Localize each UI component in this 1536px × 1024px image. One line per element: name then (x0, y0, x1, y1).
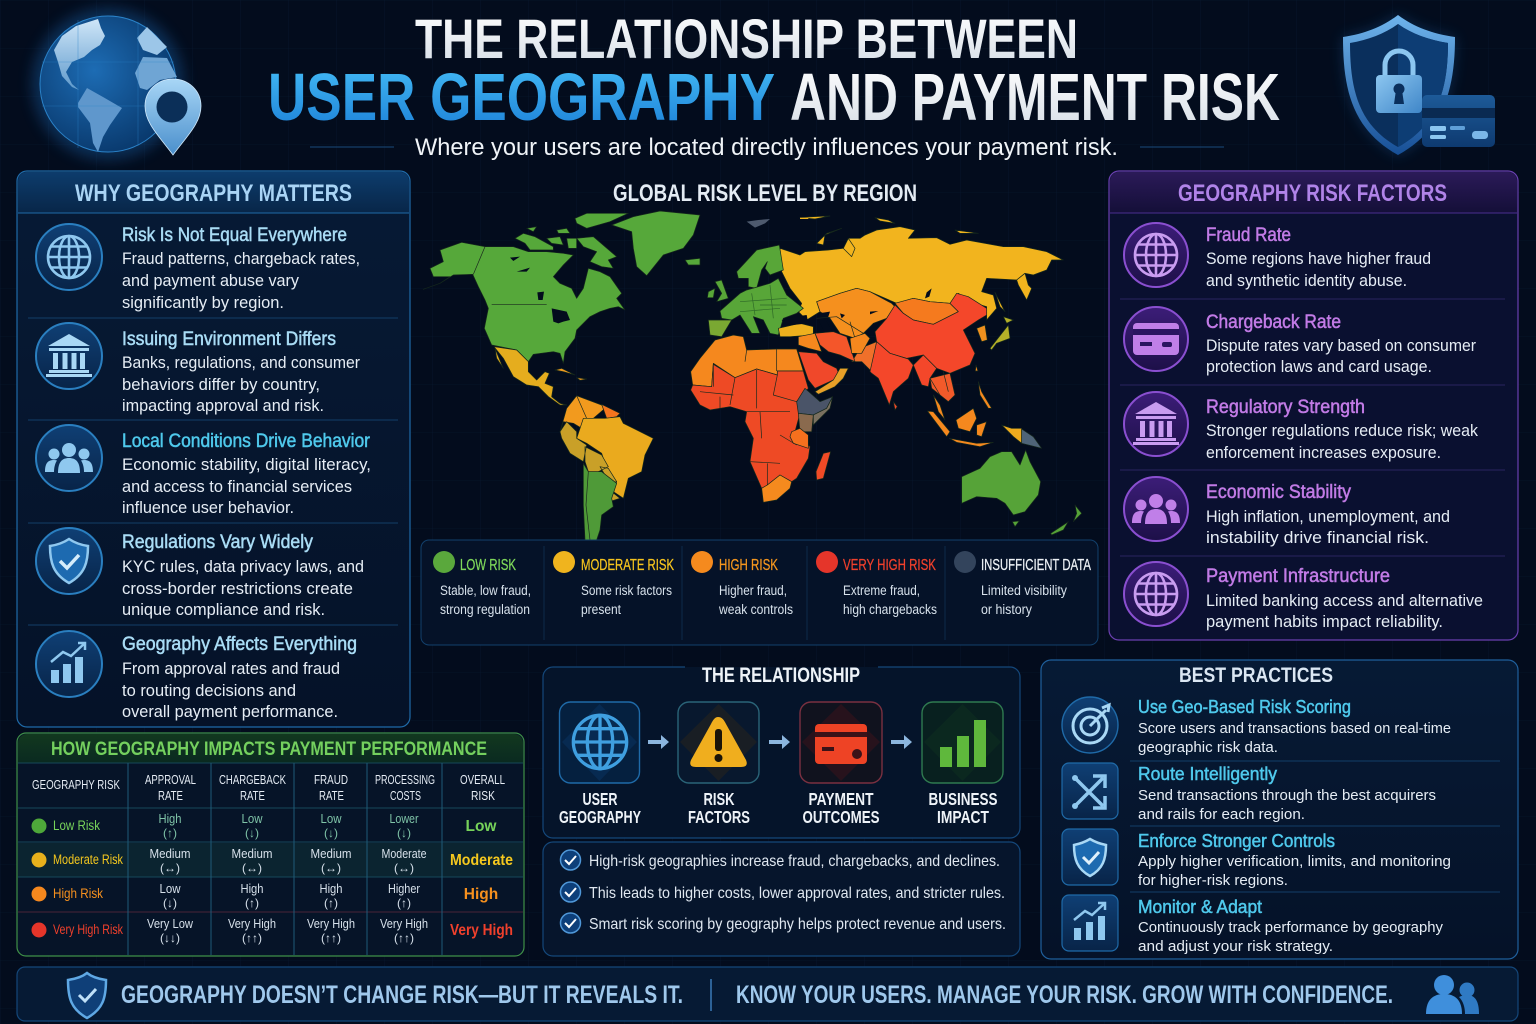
item: risk is not equal everywhere (36, 224, 360, 312)
row: high risk: High (240, 881, 264, 896)
legend: moderate risk (553, 551, 674, 617)
item: payment infrastructure (1124, 562, 1483, 631)
takeaway 2: This leads to higher costs, lower approval rates, and stricter rules. (589, 885, 1005, 902)
practice: route intelligently (1062, 763, 1436, 823)
item: geography affects everything: Geography Affects Everything (122, 634, 357, 655)
practice: enforce stronger controls: Enforce Stronger Controls (1138, 831, 1335, 851)
legend: high risk: Higher fraud, (719, 583, 787, 598)
row: very high risk: (↑↑) (394, 931, 414, 945)
item: fraud rate (1124, 223, 1431, 290)
row: moderate risk: (↔) (394, 861, 414, 875)
row: very high risk: Very High (228, 916, 276, 931)
row: very high risk (32, 916, 513, 945)
table header row: APPROVAL (145, 772, 196, 787)
table header row: RATE (319, 788, 344, 803)
legend: insufficient data (954, 551, 1091, 617)
table header row: RATE (240, 788, 265, 803)
row: moderate risk: Moderate Risk (53, 852, 123, 867)
item: local conditions drive behavior (36, 425, 371, 517)
row: moderate risk: (↔) (321, 861, 341, 875)
item: risk is not equal everywhere: significantly by region. (122, 293, 284, 312)
row: moderate risk: (↔) (242, 861, 262, 875)
map: asia and oceania (780, 216, 1082, 535)
item: issuing environment differs: behaviors differ by country, (122, 375, 320, 394)
arrow (769, 735, 790, 749)
takeaway 3: Smart risk scoring by geography helps protect revenue and users. (589, 916, 1006, 933)
takeaway 1: High-risk geographies increase fraud, chargebacks, and declines. (589, 853, 1000, 870)
item: economic stability (1124, 477, 1450, 547)
step: business impact (922, 702, 1003, 827)
legend: moderate risk: Some risk factors (581, 583, 672, 598)
table header row: RATE (158, 788, 183, 803)
legend: very high risk: high chargebacks (843, 602, 937, 617)
item: regulations vary widely (36, 528, 364, 619)
row: high risk: (↑) (245, 896, 259, 910)
panel: how geography impacts payment performance (17, 733, 524, 956)
row: high risk: Low (160, 881, 181, 896)
heading: WHY GEOGRAPHY MATTERS (75, 180, 352, 207)
item: issuing environment differs (36, 323, 360, 415)
legend: low risk (433, 551, 531, 617)
heading: GEOGRAPHY RISK FACTORS (1178, 180, 1447, 207)
row: very high risk: Very High (450, 922, 513, 939)
step: business impact: IMPACT (937, 807, 989, 827)
item: local conditions drive behavior: Economic stability, digital literacy, (122, 455, 371, 474)
table header row: COSTS (390, 788, 421, 803)
item: issuing environment differs: Issuing Environment Differs (122, 329, 336, 350)
practice: enforce stronger controls (1062, 829, 1451, 889)
row: high risk: High (320, 881, 342, 896)
row: low risk: Lower (390, 811, 419, 826)
row: low risk: Low (242, 811, 263, 826)
practice: monitor and adapt: Continuously track performance by geography (1138, 919, 1443, 936)
item: risk is not equal everywhere: Risk Is Not Equal Everywhere (122, 225, 347, 246)
item: regulations vary widely: Regulations Vary Widely (122, 532, 313, 553)
step: risk factors: RISK (704, 789, 735, 809)
title: USER GEOGRAPHY (268, 60, 775, 135)
practice: route intelligently: Route Intelligently (1138, 764, 1277, 784)
legend: very high risk: VERY HIGH RISK (843, 557, 936, 574)
row: very high risk: Very High (380, 916, 428, 931)
world risk map (423, 211, 1082, 540)
step: risk factors: FACTORS (688, 807, 750, 827)
item: risk is not equal everywhere: Fraud patterns, chargeback rates, (122, 249, 360, 268)
table header row (32, 772, 505, 803)
item: issuing environment differs: impacting approval and risk. (122, 396, 324, 415)
step: risk factors (678, 702, 759, 827)
table header row: GEOGRAPHY RISK (32, 777, 120, 792)
row: very high risk: Very High (307, 916, 355, 931)
item: geography affects everything: overall payment performance. (122, 702, 338, 721)
row: moderate risk: Medium (310, 846, 352, 861)
row: moderate risk: (↔) (160, 861, 180, 875)
title (268, 7, 1280, 135)
item: regulations vary widely: KYC rules, data privacy laws, and (122, 557, 364, 576)
practice: geo-based risk scoring: Score users and transactions based on real-time (1138, 720, 1451, 737)
legend: low risk: LOW RISK (460, 557, 516, 574)
row: moderate risk: Medium (232, 846, 272, 861)
row: moderate risk: Moderate (382, 846, 426, 861)
item: chargeback rate: protection laws and card usage. (1206, 357, 1432, 376)
legend: very high risk: Extreme fraud, (843, 583, 920, 598)
step: user geography (559, 702, 641, 827)
practice: enforce stronger controls: for higher-risk regions. (1138, 872, 1288, 889)
panel: best practices (1041, 660, 1518, 959)
row: low risk: (↑) (163, 826, 177, 840)
item: local conditions drive behavior: Local Conditions Drive Behavior (122, 431, 371, 452)
item: regulations vary widely: unique compliance and risk. (122, 600, 325, 619)
item: regulatory strength: enforcement increases exposure. (1206, 443, 1441, 462)
subtitle: Where your users are located directly influences your payment risk. (415, 134, 1118, 161)
practice: monitor and adapt: Monitor & Adapt (1138, 897, 1262, 917)
legend: low risk: strong regulation (440, 602, 530, 617)
legend: high risk: HIGH RISK (719, 557, 778, 574)
title: THE RELATIONSHIP BETWEEN (415, 7, 1078, 70)
row: low risk: Low (320, 811, 342, 826)
legend: very high risk (816, 551, 937, 617)
item: payment infrastructure: Limited banking access and alternative (1206, 591, 1483, 610)
item: regulatory strength: Stronger regulations reduce risk; weak (1206, 421, 1478, 440)
item: geography affects everything (36, 631, 357, 721)
heading: BEST PRACTICES (1179, 664, 1333, 687)
practice: monitor and adapt (1062, 895, 1443, 955)
row: high risk: (↓) (163, 896, 177, 910)
step: payment outcomes (800, 702, 882, 827)
legend: moderate risk: MODERATE RISK (581, 557, 674, 574)
row: high risk: Higher (388, 881, 421, 896)
item: payment infrastructure: Payment Infrastructure (1206, 566, 1390, 587)
practice: geo-based risk scoring: Use Geo-Based Risk Scoring (1138, 697, 1351, 717)
legend: high risk: weak controls (718, 602, 793, 617)
panel: relationship takeaways (543, 842, 1020, 956)
row: very high risk: (↑↑) (242, 931, 262, 945)
table header row: CHARGEBACK (219, 772, 286, 787)
icon: footer shield (68, 973, 106, 1018)
row: low risk: (↓) (324, 826, 338, 840)
panel: geography risk factors (1109, 171, 1518, 640)
item: payment infrastructure: payment habits impact reliability. (1206, 612, 1443, 631)
icon: shield with lock and card (1343, 15, 1495, 155)
panel: why geography matters (17, 171, 410, 727)
item: chargeback rate (1124, 307, 1476, 376)
row: low risk: (↓) (397, 826, 411, 840)
practice: route intelligently: Send transactions through the best acquirers (1138, 787, 1436, 804)
icon: globe with location pin (32, 8, 201, 160)
practice: enforce stronger controls: Apply higher verification, limits, and monitoring (1138, 853, 1451, 870)
item: issuing environment differs: Banks, regulations, and consumer (122, 353, 360, 372)
item: fraud rate: Some regions have higher fraud (1206, 249, 1431, 268)
arrow (648, 735, 669, 749)
row: very high risk: (↑↑) (321, 931, 341, 945)
step: user geography: USER (582, 789, 618, 809)
table header row: PROCESSING (375, 772, 435, 787)
row: moderate risk (32, 846, 513, 875)
row: very high risk: Very High Risk (53, 922, 123, 937)
row: low risk: Low (466, 818, 497, 835)
row: low risk: Low Risk (53, 818, 100, 833)
legend: moderate risk: present (581, 602, 621, 617)
step: business impact: BUSINESS (928, 789, 998, 809)
icon: users (1426, 975, 1479, 1014)
legend: insufficient data: or history (981, 602, 1032, 617)
item: regulatory strength (1124, 392, 1478, 462)
title: AND PAYMENT RISK (790, 60, 1280, 135)
item: chargeback rate: Dispute rates vary based on consumer (1206, 336, 1476, 355)
slogan: geography reveals risk: GEOGRAPHY DOESN’T CHANGE RISK—BUT IT REVEALS IT. (121, 981, 683, 1009)
row: low risk: (↓) (245, 826, 259, 840)
legend: low risk: Stable, low fraud, (440, 583, 531, 598)
row: very high risk: Very Low (147, 916, 194, 931)
row: very high risk: (↓↓) (160, 931, 180, 945)
item: geography affects everything: to routing decisions and (122, 681, 296, 700)
row: high risk (32, 881, 498, 910)
practice: monitor and adapt: and adjust your risk strategy. (1138, 938, 1333, 955)
item: economic stability: Economic Stability (1206, 482, 1351, 503)
step: payment outcomes: PAYMENT (808, 789, 874, 809)
practice: geo-based risk scoring: geographic risk data. (1138, 739, 1278, 756)
item: fraud rate: and synthetic identity abuse. (1206, 271, 1407, 290)
item: economic stability: High inflation, unemployment, and (1206, 507, 1450, 526)
item: fraud rate: Fraud Rate (1206, 225, 1291, 246)
arrow (891, 735, 912, 749)
map: americas (423, 211, 700, 540)
legend: insufficient data: INSUFFICIENT DATA (981, 557, 1091, 574)
map: europe, middle east and africa (691, 218, 870, 502)
item: economic stability: instability drive financial risk. (1206, 528, 1429, 547)
item: regulatory strength: Regulatory Strength (1206, 397, 1365, 418)
row: high risk: (↑) (397, 896, 411, 910)
heading: global risk level by region: GLOBAL RISK LEVEL BY REGION (613, 180, 917, 207)
item: local conditions drive behavior: influence user behavior. (122, 498, 294, 517)
practice: route intelligently: and rails for each region. (1138, 806, 1305, 823)
table header row: FRAUD (314, 772, 348, 787)
heading: THE RELATIONSHIP (702, 664, 860, 687)
practice: geo-based risk scoring (1062, 697, 1451, 756)
row: high risk: High (464, 886, 498, 903)
step: payment outcomes: OUTCOMES (802, 807, 880, 827)
item: risk is not equal everywhere: and payment abuse vary (122, 271, 299, 290)
row: moderate risk: Medium (150, 846, 190, 861)
item: chargeback rate: Chargeback Rate (1206, 312, 1341, 333)
legend: insufficient data: Limited visibility (981, 583, 1067, 598)
row: high risk: (↑) (324, 896, 338, 910)
panel: the relationship (543, 664, 1020, 838)
table header row: OVERALL (460, 772, 505, 787)
table title: HOW GEOGRAPHY IMPACTS PAYMENT PERFORMANCE (51, 739, 487, 760)
table header row: RISK (471, 788, 495, 803)
row: low risk: High (158, 811, 182, 826)
item: local conditions drive behavior: and access to financial services (122, 477, 352, 496)
legend: high risk (691, 551, 793, 617)
item: regulations vary widely: cross-border restrictions create (122, 579, 353, 598)
row: moderate risk: Moderate (450, 852, 513, 869)
row: high risk: High Risk (53, 886, 103, 901)
item: geography affects everything: From approval rates and fraud (122, 659, 340, 678)
step: user geography: GEOGRAPHY (559, 807, 641, 827)
footer banner (17, 967, 1518, 1021)
row: low risk (32, 811, 497, 840)
panel: map legend (421, 540, 1098, 645)
